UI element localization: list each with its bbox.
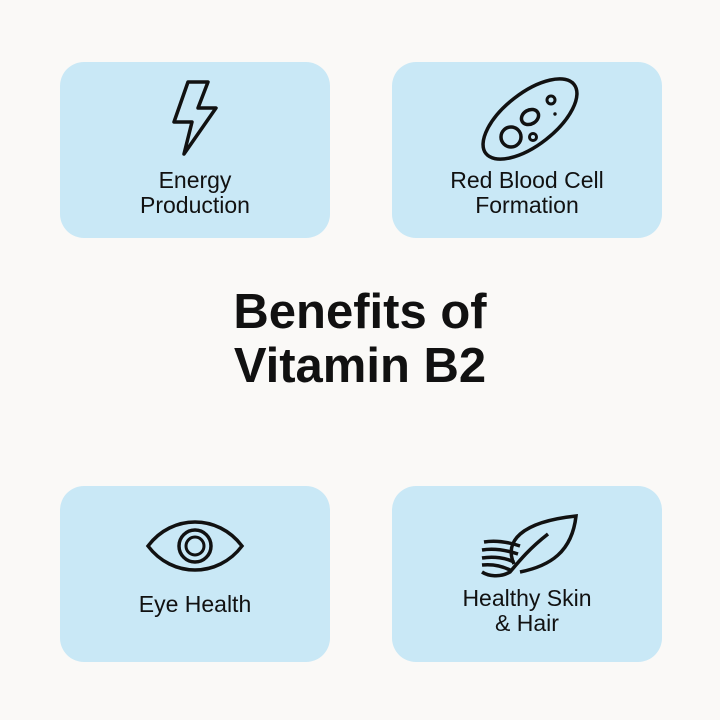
text: label: Healthy Skin: [462, 585, 592, 611]
title: Benefits of: [233, 285, 487, 339]
text: label: Formation: [475, 192, 579, 218]
icon: cell: [481, 77, 579, 161]
text: label: Red Blood Cell: [450, 167, 604, 193]
text: label: [450, 167, 604, 218]
icon: leaf and hair strands: [481, 514, 578, 578]
title: [233, 285, 487, 393]
panel: red blood cell formation: [392, 62, 662, 238]
text: label: Eye Health: [139, 591, 251, 617]
icon: eye: [146, 520, 244, 572]
icon: lightning bolt: [172, 80, 218, 156]
panel: energy production: [60, 62, 330, 238]
panel: eye health: [60, 486, 330, 662]
text: label: [462, 585, 592, 636]
text: label: [140, 167, 250, 218]
title: Vitamin B2: [234, 339, 486, 393]
text: label: & Hair: [495, 610, 559, 636]
text: label: Energy: [159, 167, 231, 193]
text: label: Production: [140, 192, 250, 218]
panel: healthy skin & hair: [392, 486, 662, 662]
